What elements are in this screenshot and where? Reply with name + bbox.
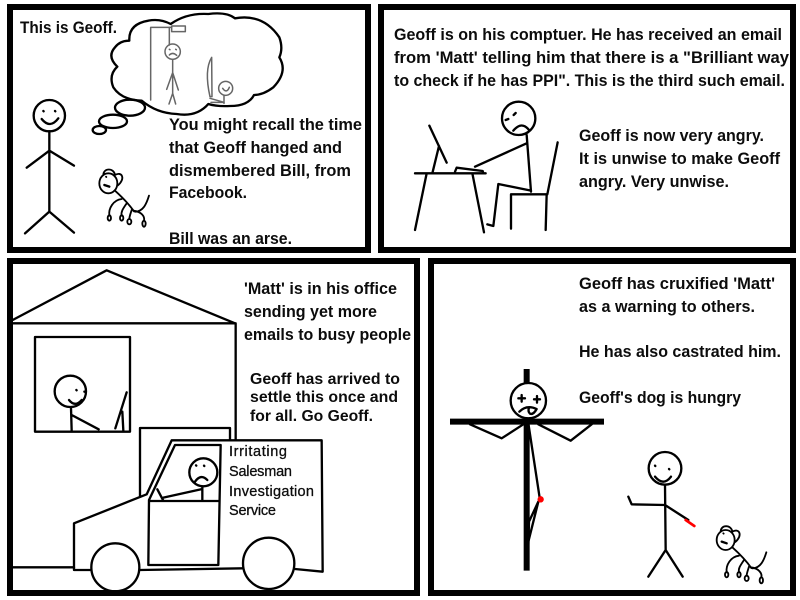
text: crucified Matt: as a warning to others. (579, 297, 755, 316)
heading: this is Geoff: This is Geoff. (20, 18, 117, 37)
text: crucified Matt: Geoff has cruxified 'Matt' (579, 274, 775, 293)
text: Matt in office: 'Matt' is in his office (244, 279, 397, 298)
figure: angry Geoff at desk and chair (415, 102, 558, 232)
dog (717, 526, 766, 583)
dog (99, 169, 149, 227)
text: Geoff has arrived: for all. Go Geoff. (250, 408, 373, 425)
cross with Matt (450, 369, 604, 571)
panel frame (10, 261, 417, 593)
text: van lettering: Service (229, 503, 276, 519)
text: email description: from 'Matt' telling him that there is a "Brilliant way (394, 48, 790, 67)
text: Geoff has arrived: Geoff has arrived to (250, 371, 400, 388)
text: Geoff has arrived: settle this once and (250, 389, 398, 406)
text: Geoff is angry: angry. Very unwise. (579, 172, 729, 191)
thought: hanged Bill on gallows (151, 26, 185, 104)
drawing group: panel 4 art (450, 369, 766, 583)
text: email description: to check if he has PPI". This is the third such email. (394, 71, 785, 90)
text: you might recall: You might recall the time (169, 115, 362, 134)
van with angry Geoff (74, 440, 323, 591)
thought bubbles (93, 100, 145, 134)
drawing group: office and van (13, 270, 323, 591)
thought: smiling Geoff with knife (207, 57, 233, 103)
text: crucified Matt: He has also castrated him. (579, 342, 781, 361)
text: van lettering: Irritating (229, 444, 287, 460)
drawing group: panel 1 art (25, 13, 283, 233)
text: you might recall: dismembered Bill, from (169, 161, 351, 180)
panel: Geoff at computer (381, 7, 794, 250)
text: you might recall: Facebook. (169, 183, 247, 202)
figure: Geoff smiling (25, 100, 74, 233)
panel: crucifixion (431, 261, 793, 593)
building (13, 270, 236, 567)
text: Geoff is angry: It is unwise to make Geoff (579, 149, 780, 168)
text: van lettering: Salesman (229, 464, 292, 480)
text: van lettering: Investigation (229, 484, 314, 500)
panel frame (381, 7, 793, 250)
window with Matt at computer (35, 337, 130, 432)
text: Matt in office: emails to busy people (244, 325, 411, 344)
thought cloud (111, 13, 283, 115)
figure: Geoff with bloody hand (628, 452, 694, 577)
text: you might recall: Bill was an arse. (169, 229, 292, 248)
text: Matt in office: sending yet more (244, 302, 377, 321)
panel frame (10, 7, 368, 250)
panel: Matt's office and van (10, 261, 417, 593)
panel frame (431, 261, 793, 593)
text: crucified Matt: Geoff's dog is hungry (579, 388, 741, 407)
panel: this is Geoff (10, 7, 368, 250)
text: email description: Geoff is on his comptuer. He has received an email (394, 25, 782, 44)
text: Geoff is angry: Geoff is now very angry. (579, 126, 764, 145)
text: you might recall: that Geoff hanged and (169, 138, 342, 157)
